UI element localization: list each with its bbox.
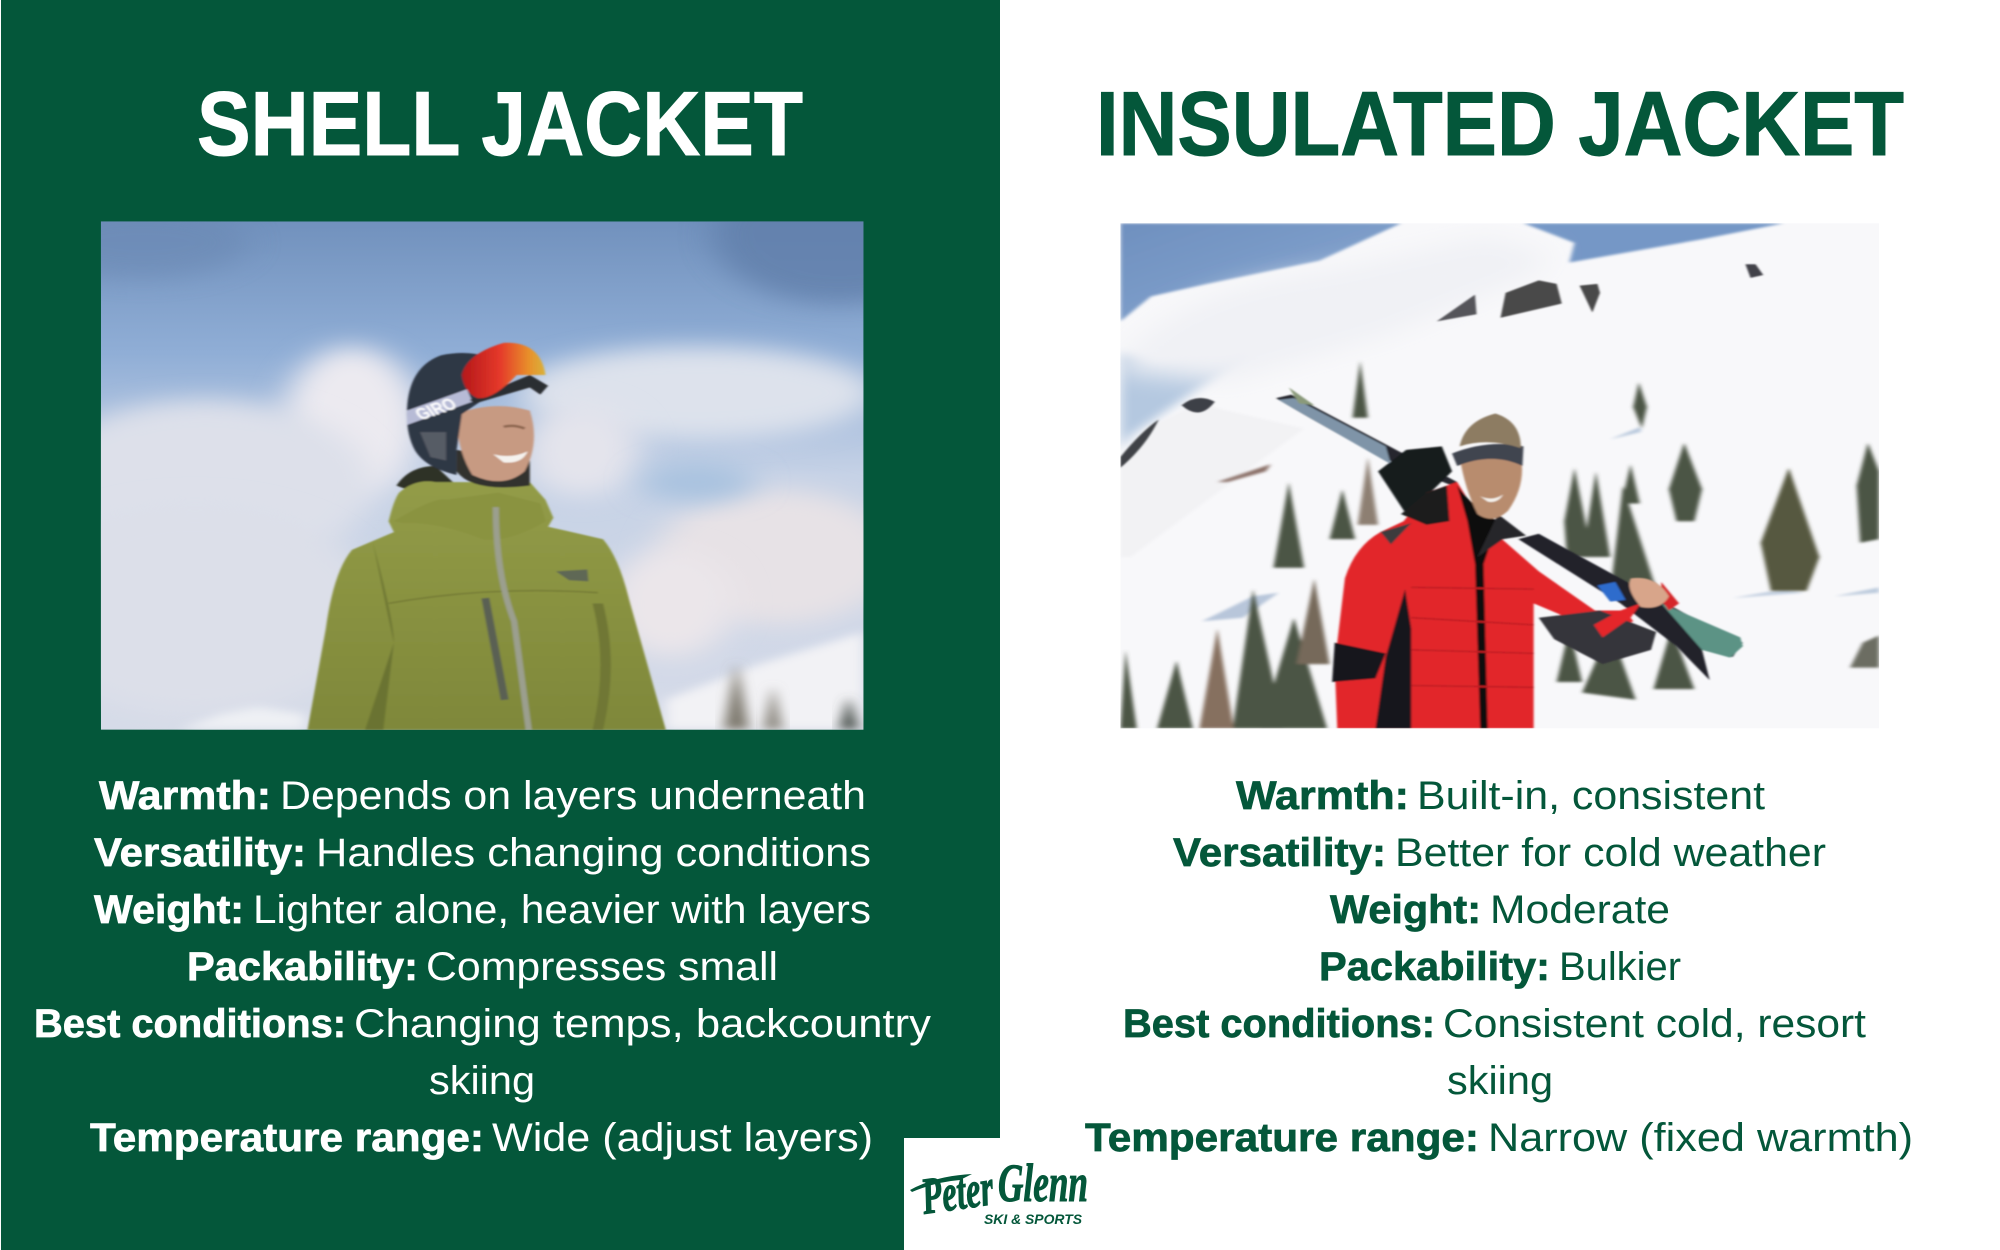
line: versatility: Versatility: xyxy=(1173,831,1386,875)
line: versatility xyxy=(94,831,871,875)
trees xyxy=(1120,361,1879,728)
panel: insulated jacket xyxy=(1085,74,1913,1160)
line: packability xyxy=(187,945,778,989)
line: best conditions: skiing xyxy=(1447,1059,1553,1103)
line: best conditions: Changing temps, backcountry xyxy=(354,1002,931,1046)
line: temperature range xyxy=(90,1116,873,1160)
line: weight: Weight: xyxy=(94,888,244,932)
title: insulated jacket: INSULATED JACKET xyxy=(1096,74,1904,175)
line: packability: Compresses small xyxy=(426,945,778,989)
line: best conditions xyxy=(34,1002,931,1103)
line: versatility: Handles changing conditions xyxy=(316,831,871,875)
line: weight xyxy=(1330,888,1670,932)
line: packability: Packability: xyxy=(187,945,418,989)
line: weight: Lighter alone, heavier with layers xyxy=(253,888,871,932)
photo: skier in green shell jacket xyxy=(100,221,864,730)
line: temperature range: Wide (adjust layers) xyxy=(492,1116,873,1160)
line: packability: Bulkier xyxy=(1559,945,1681,989)
logo: Peter Glenn Ski & Sports xyxy=(904,1138,1088,1250)
line: versatility: Versatility: xyxy=(94,831,306,875)
spec list: insulated jacket xyxy=(1085,774,1913,1160)
logo: Peter Glenn Ski & Sports: SKI & SPORTS xyxy=(984,1211,1083,1227)
line: best conditions xyxy=(1123,1002,1866,1103)
line: best conditions: Consistent cold, resort xyxy=(1443,1002,1866,1046)
line: packability xyxy=(1319,945,1681,989)
line: warmth xyxy=(1236,774,1765,818)
line: packability: Packability: xyxy=(1319,945,1550,989)
line: temperature range xyxy=(1085,1116,1913,1160)
line: temperature range: Temperature range: xyxy=(90,1116,484,1160)
line: warmth: Warmth: xyxy=(1236,774,1409,818)
line: warmth: Depends on layers underneath xyxy=(280,774,866,818)
line: versatility: Better for cold weather xyxy=(1395,831,1826,875)
line: best conditions: Best conditions: xyxy=(1123,1002,1435,1046)
line: best conditions: skiing xyxy=(429,1059,535,1103)
line: warmth: Built-in, consistent xyxy=(1417,774,1765,818)
line: warmth: Warmth: xyxy=(99,774,271,818)
line: temperature range: Narrow (fixed warmth) xyxy=(1488,1116,1913,1160)
person: GIRO xyxy=(411,395,461,424)
logo: Peter Glenn Ski & Sports: Glenn xyxy=(998,1153,1088,1213)
title: shell jacket: SHELL JACKET xyxy=(197,74,803,175)
panel: shell jacket xyxy=(1,0,1000,1250)
spec list: shell jacket xyxy=(34,774,931,1160)
line: versatility xyxy=(1173,831,1826,875)
person xyxy=(308,343,666,730)
line: weight: Weight: xyxy=(1330,888,1481,932)
line: best conditions: Best conditions: xyxy=(34,1002,346,1046)
photo: skier in red insulated jacket xyxy=(1120,223,1879,728)
logo: Peter Glenn Ski & Sports: Peter xyxy=(917,1159,997,1226)
line: temperature range: Temperature range: xyxy=(1085,1116,1479,1160)
line: weight: Moderate xyxy=(1490,888,1670,932)
skis and skier xyxy=(1276,387,1743,728)
